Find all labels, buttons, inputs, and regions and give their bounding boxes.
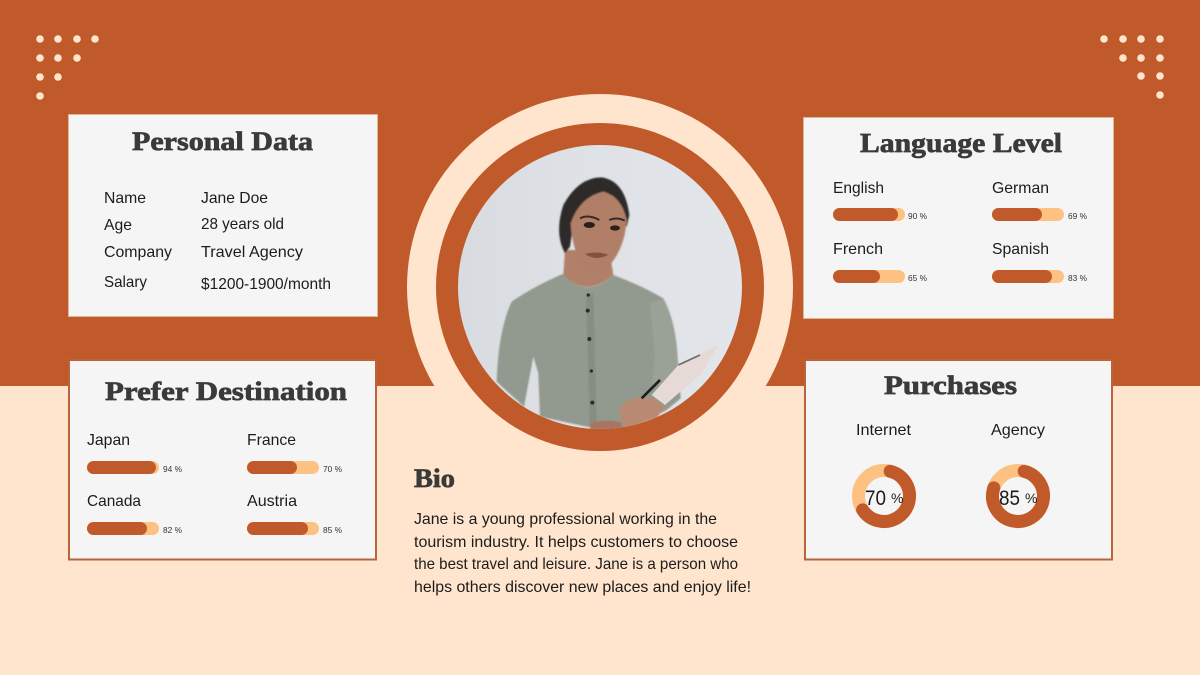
bar: Canada 82% — [87, 493, 182, 535]
bar: Japan 94%: Japan — [87, 432, 130, 449]
photo: woman holding a clipboard — [458, 145, 742, 433]
heading: Personal Data — [132, 127, 313, 156]
panel background — [68, 114, 378, 316]
bar: Spanish 83%: Spanish — [992, 241, 1049, 258]
data rows: Company — [104, 244, 172, 261]
bio text: the best travel and leisure. Jane is a person who — [414, 556, 738, 573]
bar: Canada 82%: 82 % — [163, 525, 182, 535]
bar: Canada 82%: Canada — [87, 493, 141, 510]
bar: France 70%: France — [247, 432, 296, 449]
bar: France 70% — [247, 432, 342, 474]
bio text: tourism industry. It helps customers to choose — [414, 534, 738, 551]
buttons — [586, 293, 594, 405]
bar: Austria 85%: 85 % — [323, 525, 342, 535]
data rows: $1200-1900/month — [201, 276, 331, 293]
bio text: helps others discover new places and enjoy life! — [414, 579, 751, 596]
panel: purchases — [805, 360, 1112, 560]
heading: Prefer Destination — [105, 376, 347, 406]
bar: Japan 94% — [87, 432, 182, 474]
data rows: Salary — [104, 274, 147, 291]
data rows: Name — [104, 190, 146, 207]
panel: personal data — [68, 114, 378, 316]
dots: top right — [1100, 35, 1164, 99]
ring: inner rust — [436, 123, 764, 451]
bar: French 65%: 65 % — [908, 273, 927, 283]
bio heading: Bio — [414, 464, 455, 493]
bar: English 90%: 90 % — [908, 211, 927, 221]
bar: German 69% — [992, 180, 1087, 221]
data rows: Jane Doe — [201, 190, 268, 207]
bar: French 65%: French — [833, 241, 883, 258]
clipboard and pen — [642, 345, 718, 405]
donut: Internet 70%: Internet — [856, 422, 912, 439]
heading: Purchases — [884, 371, 1017, 400]
dots: top left — [36, 35, 99, 100]
data rows: Age — [104, 217, 132, 234]
data rows: Travel Agency — [201, 244, 303, 261]
panel background — [805, 360, 1112, 560]
bar: French 65% — [833, 241, 927, 283]
donut: Internet 70%: % — [891, 490, 903, 506]
donut: Agency 85%: % — [1025, 490, 1037, 506]
data rows — [104, 190, 331, 293]
heading: Language Level — [860, 128, 1063, 158]
background: rust upper band — [0, 0, 1200, 386]
panel: prefer destination — [69, 360, 376, 560]
donut: Agency 85% — [987, 422, 1049, 527]
donut: Agency 85%: 85 — [999, 487, 1020, 510]
donut: Internet 70% — [853, 422, 915, 527]
portrait with concentric rings — [407, 94, 793, 480]
donut: Agency 85%: Agency — [991, 422, 1045, 439]
bar: German 69%: 69 % — [1068, 211, 1087, 221]
panel: language level — [804, 118, 1114, 318]
facial features — [580, 217, 625, 258]
bar: Austria 85%: Austria — [247, 493, 297, 510]
panel background — [804, 118, 1114, 318]
bar: Spanish 83%: 83 % — [1068, 273, 1087, 283]
bar: France 70%: 70 % — [323, 464, 342, 474]
bar: German 69%: German — [992, 180, 1049, 197]
bar: Austria 85% — [247, 493, 342, 535]
bar: English 90% — [833, 180, 927, 221]
bio text — [414, 511, 751, 596]
bar: English 90%: English — [833, 180, 884, 197]
donut: Internet 70%: 70 — [865, 487, 886, 510]
data rows: 28 years old — [201, 216, 284, 233]
background: cream lower band — [0, 386, 1200, 675]
bio text: Jane is a young professional working in the — [414, 511, 717, 528]
panel background — [69, 360, 376, 560]
bar: Spanish 83% — [992, 241, 1087, 283]
bar: Japan 94%: 94 % — [163, 464, 182, 474]
bio section — [414, 464, 751, 596]
ring: outer cream — [407, 94, 793, 480]
